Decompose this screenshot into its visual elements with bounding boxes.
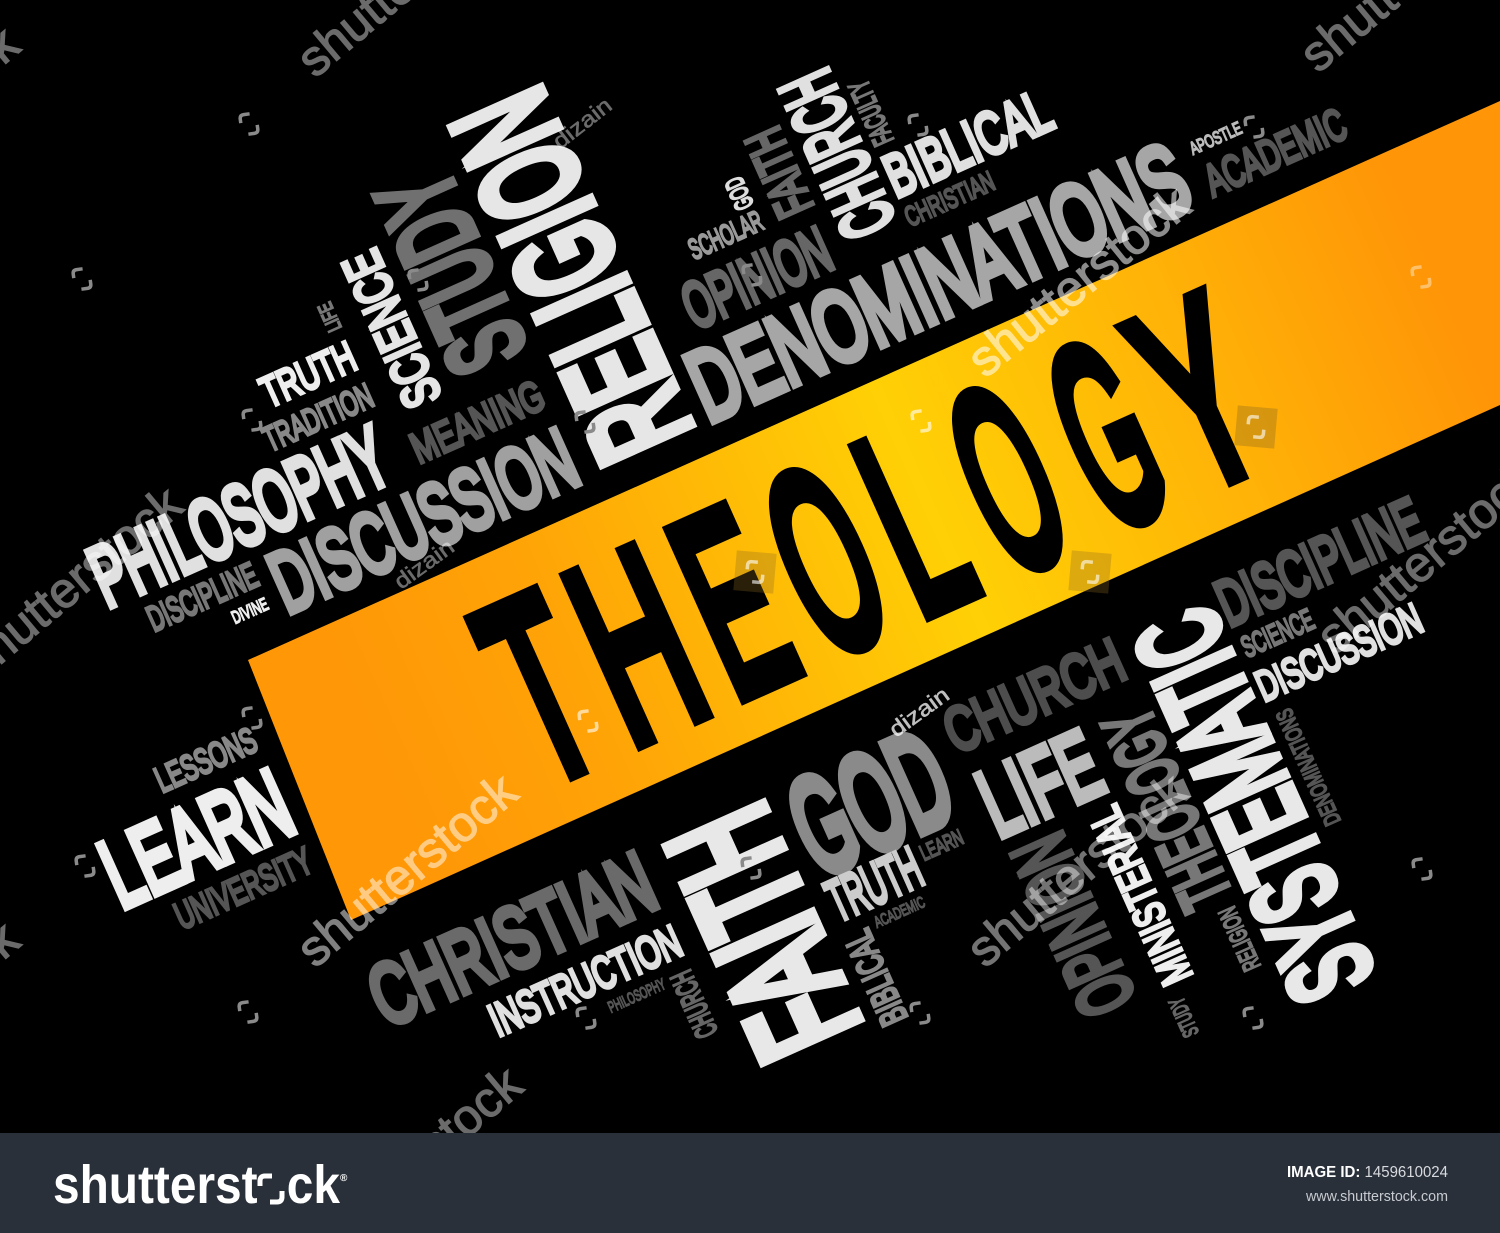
word: LIFE: LIFE: [314, 299, 347, 335]
banner title: THEOLOGY: E: [638, 455, 827, 749]
icon: mark 6: [743, 264, 761, 286]
word: DISCUSSION: DISCUSSION: [256, 411, 591, 631]
watermark marks on black: [73, 113, 1431, 1029]
icon: square mark left: [733, 550, 777, 594]
icon: mark 4: [409, 269, 427, 291]
watermark marks on banner: [579, 266, 1430, 732]
icon: mark 9: [243, 707, 261, 729]
icon: mark 16: [1413, 858, 1431, 880]
lower word cluster: [85, 484, 1435, 1081]
footer logo bracket mark: [260, 1176, 282, 1202]
icon: square mark center: [1068, 550, 1112, 594]
icon: mark 12: [239, 1001, 257, 1023]
banner title: THEOLOGY: T: [446, 542, 634, 836]
word: TRUTH: TRUTH: [817, 835, 932, 934]
icon: mark banner: [912, 410, 930, 432]
word: DENOMINATIONS: DENOMINATIONS: [1271, 705, 1346, 830]
icon: mark 15: [1244, 1007, 1262, 1029]
banner title: THEOLOGY: H: [534, 495, 739, 796]
word: TRUTH: TRUTH: [253, 333, 363, 417]
word: INSTRUCTION: INSTRUCTION: [481, 915, 689, 1046]
icon: mark 2: [73, 268, 91, 290]
word: SCIENCE: SCIENCE: [1236, 603, 1319, 664]
word: STUDY: STUDY: [1164, 993, 1204, 1041]
word: UNIVERSITY: UNIVERSITY: [169, 840, 319, 938]
footer registered mark: ®: [340, 1173, 348, 1184]
word: CHRISTIAN: CHRISTIAN: [355, 834, 669, 1045]
word: LESSONS: LESSONS: [149, 719, 263, 800]
word: MINISTERIAL: MINISTERIAL: [1080, 798, 1202, 992]
word: CHURCH: CHURCH: [934, 626, 1135, 767]
word: CHURCH: CHURCH: [664, 965, 724, 1043]
watermark: center: shutterstock: [957, 175, 1201, 388]
word: THEOLOGY: THEOLOGY: [1089, 697, 1247, 921]
word: DISCIPLINE: DISCIPLINE: [141, 554, 264, 639]
word: RELIGION: RELIGION: [1214, 902, 1266, 975]
word: FAITH: FAITH: [637, 784, 890, 1081]
word: LIFE: LIFE: [963, 711, 1117, 857]
word: ACADEMIC: ACADEMIC: [872, 894, 928, 932]
icon: mark 7: [909, 114, 927, 136]
upper word cluster: [76, 59, 1354, 639]
word: ACADEMIC: ACADEMIC: [1196, 98, 1354, 206]
icon: mark 3: [243, 409, 261, 431]
word: MEANING: MEANING: [403, 372, 552, 473]
icon: mark 11: [742, 857, 760, 879]
footer logo: shutterstock: [53, 1155, 341, 1215]
watermark: dizain lower: dizain: [884, 682, 954, 742]
word: PHILOSOPHY: PHILOSOPHY: [606, 976, 668, 1017]
word: APOSTLE: APOSTLE: [1186, 118, 1245, 159]
word: BIBLICAL: BIBLICAL: [874, 77, 1062, 210]
word: SCHOLAR: SCHOLAR: [684, 205, 768, 266]
word: BIBLICAL: BIBLICAL: [837, 923, 916, 1031]
word: GOD: GOD: [768, 702, 974, 905]
word: DIVINE: DIVINE: [228, 594, 271, 628]
word: FAITH: FAITH: [735, 119, 825, 226]
word: GOD: GOD: [719, 172, 759, 215]
icon: mark banner right: [1412, 266, 1430, 288]
icon: mark 13: [577, 1007, 595, 1029]
word: SCIENCE: SCIENCE: [332, 241, 453, 416]
banner title: THEOLOGY: G: [1013, 289, 1200, 582]
icon: mark 14: [911, 1002, 929, 1024]
word: LEARN: LEARN: [85, 749, 308, 928]
footer bar: [0, 1133, 1500, 1233]
watermark: dizain top: dizain: [548, 92, 617, 154]
word: LEARN: LEARN: [916, 824, 967, 866]
watermark: lower middle: shutterstock: [956, 762, 1198, 977]
image id: IMAGE ID: 1459610024: [1287, 1164, 1448, 1181]
icon: mark 1: [240, 113, 258, 135]
watermark: dizain left: dizain: [389, 534, 459, 594]
word: CHRISTIAN: CHRISTIAN: [900, 165, 999, 232]
icon: mark 5: [576, 411, 594, 433]
word: TRADITION: TRADITION: [257, 376, 379, 459]
word: DENOMINATIONS: DENOMINATIONS: [671, 122, 1205, 443]
watermark: banner left: shutterstock: [286, 762, 528, 977]
banner title: THEOLOGY: L: [823, 376, 1005, 667]
word: OPINION: OPINION: [994, 821, 1152, 1029]
word: FACULTY: FACULTY: [843, 75, 900, 150]
icon: mark banner lower: [579, 710, 597, 732]
word: OPINION: OPINION: [671, 213, 842, 343]
word: SYSTEMATIC: SYSTEMATIC: [1110, 591, 1398, 1020]
banner title: THEOLOGY: O: [730, 413, 922, 709]
icon: mark 8: [1245, 116, 1263, 138]
orange banner: [248, 101, 1500, 920]
icon: square mark right: [1234, 405, 1278, 449]
website: www.shutterstock.com: [1305, 1188, 1448, 1205]
banner title: THEOLOGY: Y: [1099, 244, 1299, 543]
word: STUDY: STUDY: [354, 154, 548, 391]
icon: mark 10: [76, 855, 94, 877]
word: PHILOSOPHY: PHILOSOPHY: [76, 409, 403, 625]
banner title: THEOLOGY: O: [913, 333, 1102, 626]
